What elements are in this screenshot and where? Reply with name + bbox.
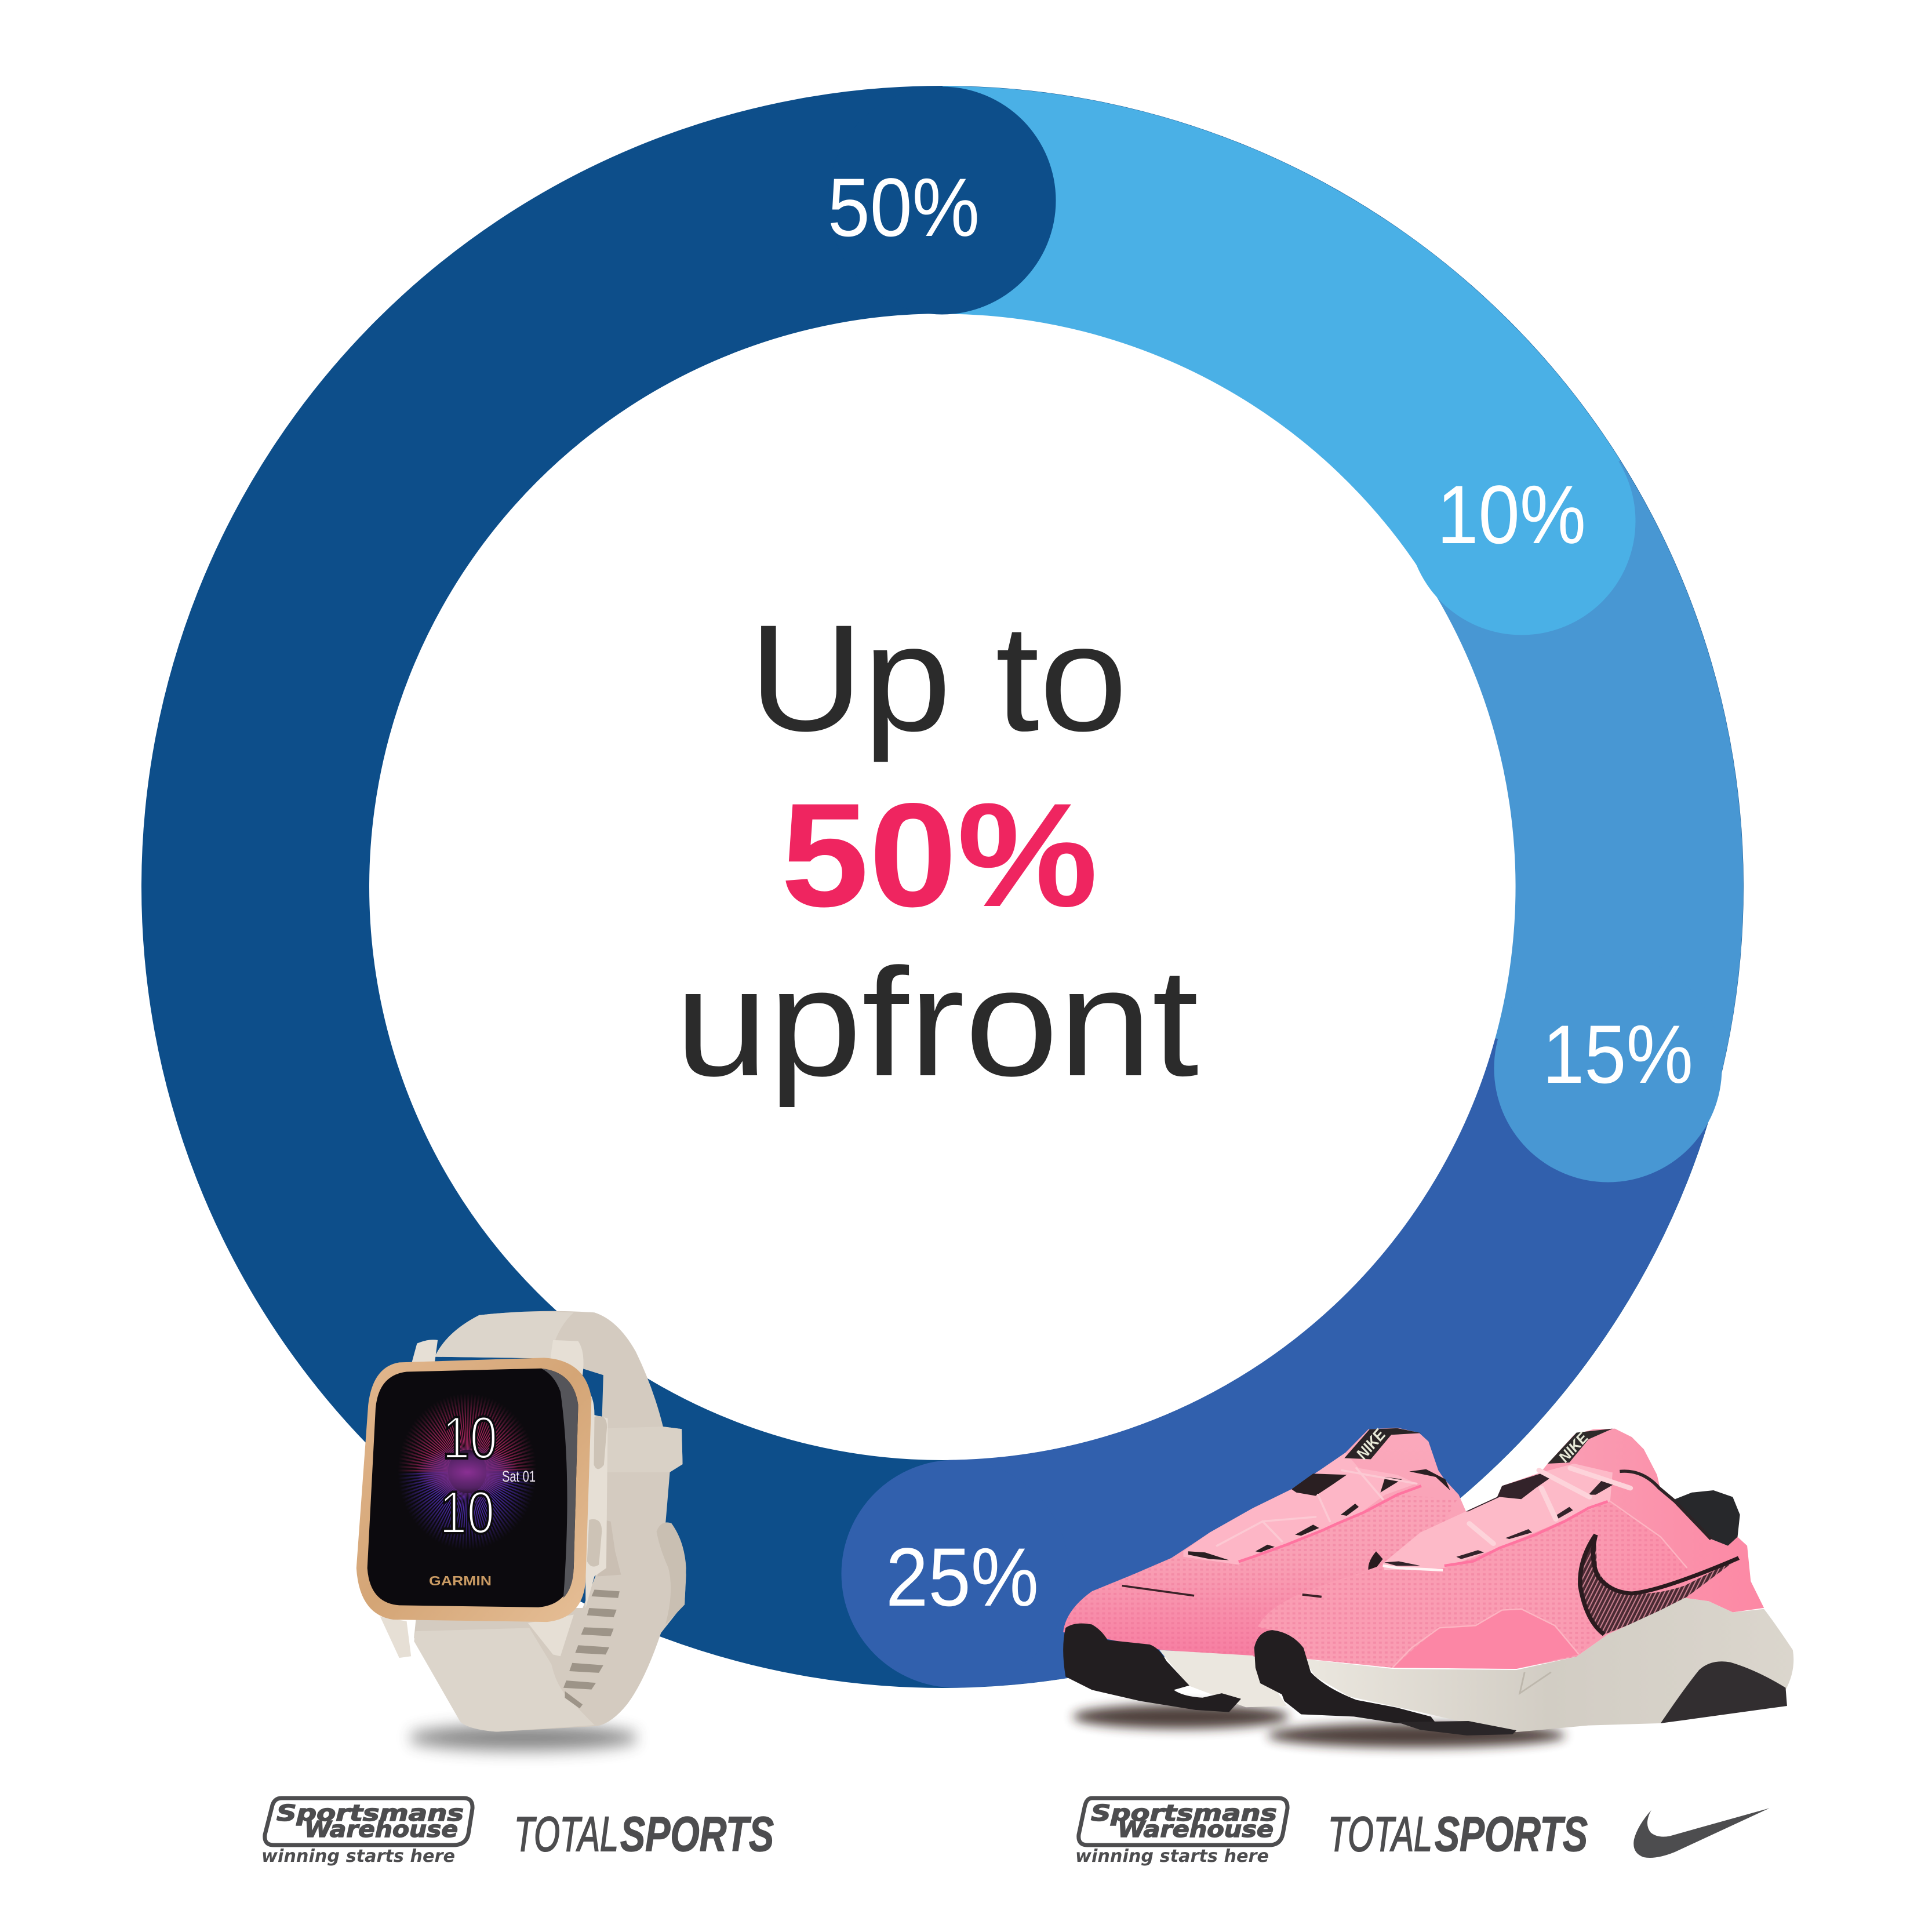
Sportsmans Warehouse logo: winning starts here [1075, 1846, 1269, 1866]
Sportsmans Warehouse logo [1075, 1798, 1287, 1866]
watch date: Sat 01 [502, 1468, 536, 1485]
headline line: upfront: upfront [675, 937, 1199, 1109]
right shoe eyestay [1445, 1501, 1608, 1566]
label: 15%: 15% [1542, 1009, 1693, 1101]
right shoe collar lining [1675, 1490, 1740, 1546]
midsole swoosh emboss [1520, 1672, 1551, 1693]
Totalsports logo: TOTAL [514, 1807, 618, 1861]
left shoe eyestay [1239, 1486, 1421, 1562]
left shoe upper [1063, 1428, 1466, 1657]
screen [368, 1369, 578, 1607]
right shoe heel outsole [1661, 1661, 1787, 1723]
starburst lower [423, 1422, 512, 1522]
left shoe midsole [1159, 1650, 1287, 1707]
swoosh outline [1580, 1535, 1739, 1635]
swoosh on right shoe [1580, 1535, 1739, 1635]
label: 50%: 50% [828, 162, 980, 254]
infographic canvas [141, 86, 1793, 1865]
headline line: 50%: 50% [781, 773, 1098, 938]
Totalsports logo: TOTAL [1328, 1807, 1432, 1861]
left shoe tongue tag [1344, 1428, 1421, 1459]
swoosh hatch fill [1580, 1535, 1739, 1635]
Sportsmans Warehouse logo: Warehouse [304, 1817, 458, 1842]
label: 10%: 10% [1437, 469, 1586, 561]
watch shadow [408, 1725, 639, 1751]
right shoe upper [1258, 1429, 1764, 1669]
right shoe tag text: NIKE [1555, 1429, 1592, 1465]
segment: 10% light blue [943, 200, 1636, 635]
right shoe eyelet bands [1384, 1473, 1615, 1566]
right shoe mesh [1258, 1501, 1688, 1669]
headline line: Up to: Up to [749, 593, 1127, 763]
shoe shadows [1073, 1704, 1566, 1748]
right shoe toe mark [1302, 1595, 1322, 1597]
side buttons [587, 1416, 607, 1567]
product: pink trainers [1063, 1425, 1793, 1748]
label: 25%: 25% [886, 1531, 1039, 1624]
gold bezel [356, 1358, 591, 1622]
left shoe mesh [1063, 1495, 1457, 1657]
right shoe laces [1469, 1468, 1631, 1544]
small swoosh on left shoe [1368, 1551, 1383, 1573]
textured strap top [435, 1312, 574, 1359]
Nike swoosh logo [1633, 1808, 1770, 1858]
Sportsmans Warehouse logo: Sportsmans [1091, 1800, 1277, 1826]
right shoe toe outsole [1254, 1630, 1438, 1726]
right shoe side panel [1392, 1609, 1579, 1669]
strap keeper shading [606, 1427, 683, 1472]
Totalsports logo: SPORTS [1435, 1807, 1588, 1861]
right shoe panel seam [1392, 1609, 1579, 1668]
Sportsmans Warehouse logo: winning starts here [261, 1846, 455, 1866]
segment: 25% royal blue [842, 1068, 1605, 1688]
centre headline [675, 593, 1199, 1109]
left shoe tag text: NIKE [1352, 1425, 1389, 1462]
right shoe tongue tag [1548, 1429, 1613, 1464]
product: smartwatch [356, 1311, 686, 1751]
brand logos: left group [261, 1798, 774, 1866]
watch brand: GARMIN [429, 1573, 492, 1588]
Sportsmans Warehouse logo: Sportsmans [276, 1800, 464, 1826]
left shoe lace panel [1183, 1453, 1417, 1564]
segment: 50% rounded end cap [828, 87, 1056, 314]
strap holes [563, 1589, 620, 1708]
right shoe midsole [1304, 1598, 1793, 1732]
Totalsports logo: SPORTS [620, 1807, 774, 1861]
buckle [657, 1522, 686, 1625]
watch time minute: 10 [439, 1479, 494, 1547]
Totalsports logo [1328, 1807, 1588, 1861]
strap [414, 1311, 686, 1732]
metal clasp [598, 1520, 621, 1576]
segment: 50% dark navy ring [255, 199, 1630, 1574]
starburst glow [416, 1446, 519, 1499]
starburst upper [423, 1422, 512, 1522]
left shoe eyelet bands [1188, 1469, 1450, 1560]
donut chart [255, 87, 1722, 1688]
right shoe collar trim [1620, 1471, 1711, 1539]
segment: 15% medium blue [1494, 521, 1722, 1183]
screen reflection [541, 1369, 578, 1598]
lugs and case side [380, 1340, 607, 1658]
left shoe toe mark [1122, 1586, 1194, 1596]
Totalsports logo [514, 1807, 774, 1861]
Sportsmans Warehouse logo: Warehouse [1118, 1817, 1274, 1842]
right shoe heel seam [1610, 1501, 1687, 1568]
right shoe lace panel [1383, 1464, 1613, 1570]
Sportsmans Warehouse logo [261, 1798, 472, 1866]
brand logos: right group [1075, 1798, 1770, 1866]
left shoe outsole [1063, 1624, 1241, 1712]
right shoe mid outsole [1397, 1721, 1516, 1735]
right shoe toe highlight [1383, 1566, 1443, 1570]
watch time hour: 10 [442, 1405, 497, 1472]
textured strap bottom [414, 1628, 595, 1732]
left shoe laces [1217, 1468, 1417, 1546]
